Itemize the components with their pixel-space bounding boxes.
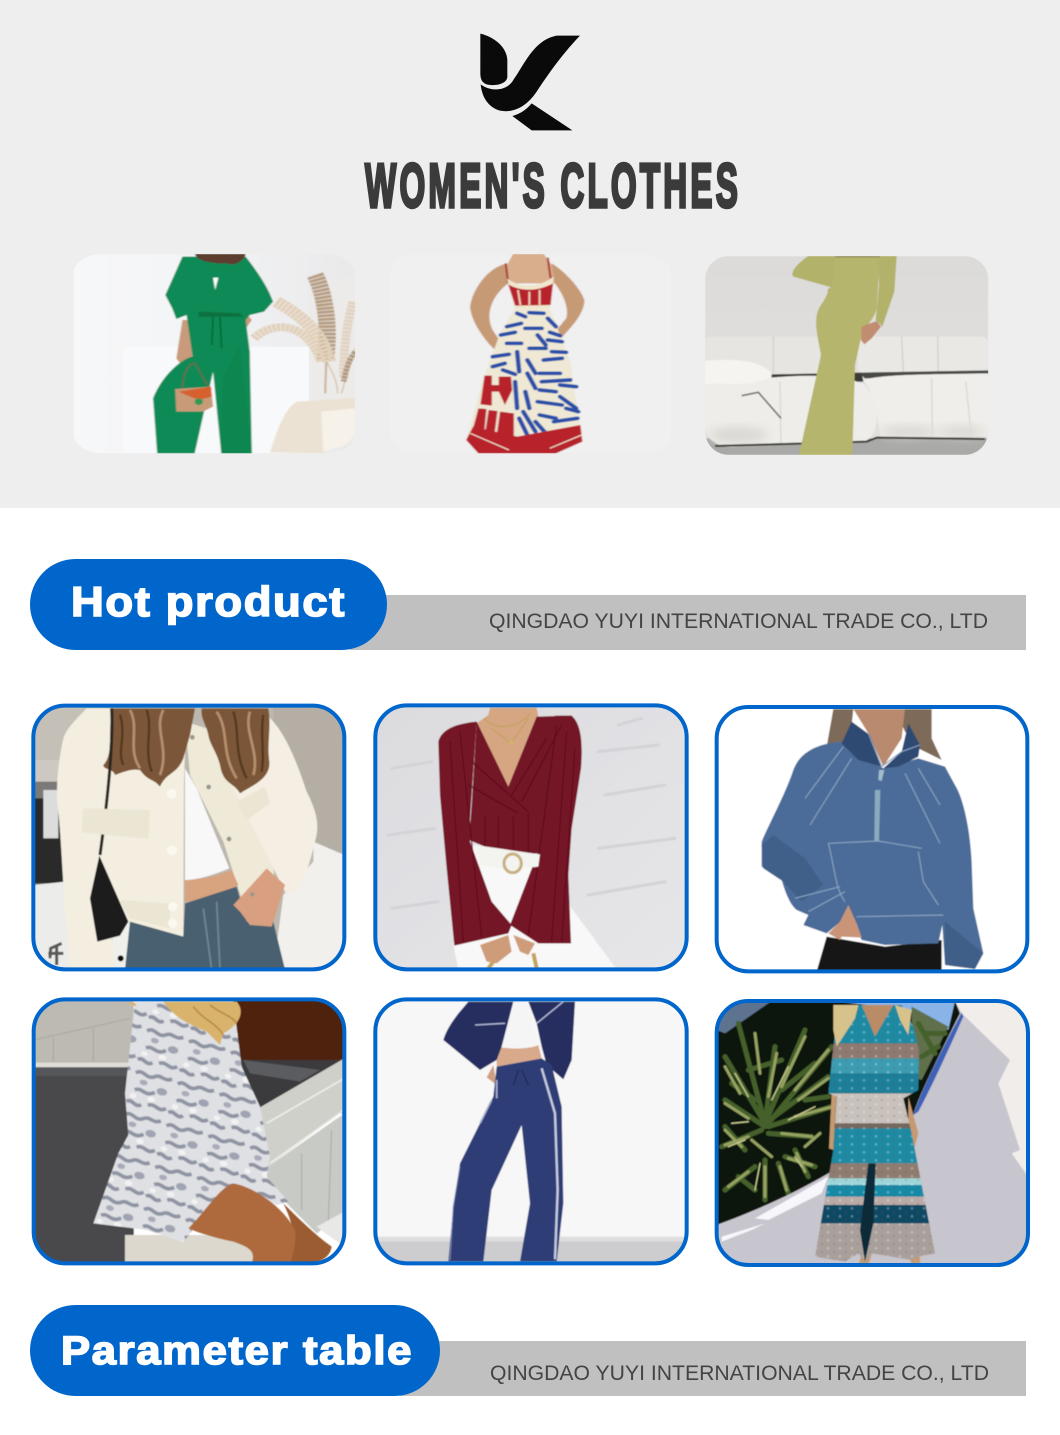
product card: burgundy wrap sweater — [375, 705, 687, 969]
company name: QINGDAO YUYI INTERNATIONAL TRADE CO., LTD — [490, 1361, 989, 1385]
heading: Parameter table — [61, 1329, 413, 1373]
heading: Hot product — [71, 578, 346, 625]
product card: blue half-zip sweatshirt — [717, 707, 1027, 971]
title: WOMEN'S CLOTHES — [365, 152, 741, 221]
photo: green two-piece outfit — [73, 254, 355, 453]
grey band — [350, 595, 1026, 650]
section header: hot product — [30, 559, 1026, 650]
product card: boho maxi dress — [717, 1001, 1028, 1265]
photo: olive long dress on white sofa — [705, 256, 988, 455]
blue pill — [30, 1305, 440, 1396]
photo: printed fresh dress — [466, 254, 586, 454]
icon: brand logo — [480, 34, 580, 130]
top banner background — [0, 0, 1060, 508]
product card: toile print mini dress — [34, 999, 347, 1267]
product card: cream jacket — [33, 706, 345, 969]
blue pill — [30, 559, 387, 650]
product card: navy tracksuit — [375, 999, 687, 1265]
grey band — [400, 1341, 1026, 1396]
company name: QINGDAO YUYI INTERNATIONAL TRADE CO., LTD — [489, 609, 988, 633]
section header: parameter table — [30, 1305, 1026, 1396]
